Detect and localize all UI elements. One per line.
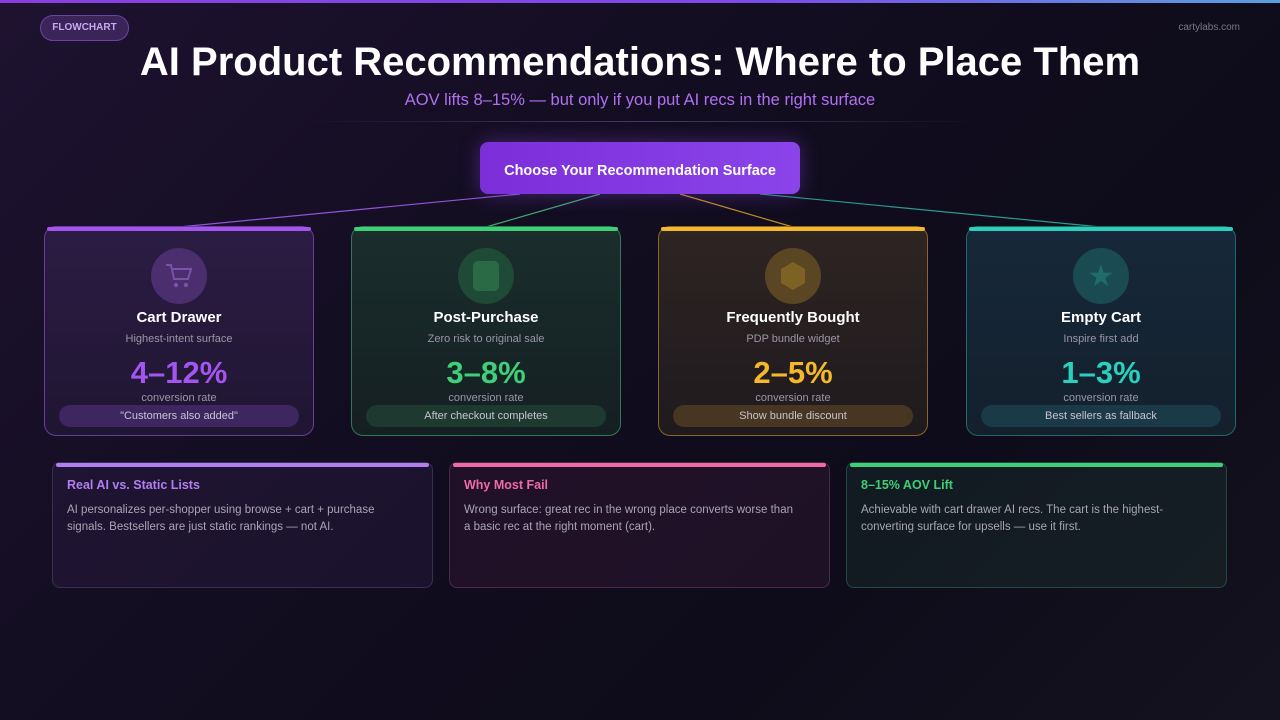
icon: square [458,248,514,304]
note: AOV lift: Achievable with cart drawer AI recs. The cart is the highest-converting surface for upsells — use it first. [861,504,1163,533]
card: cart drawer: Highest-intent surface [126,333,232,345]
icon: star: ★ [1088,260,1114,292]
card: frequently bought: Show bundle discount [739,410,847,422]
icon: cart [151,248,207,304]
connector arrows [183,194,1097,226]
card: post-purchase [351,226,621,436]
note: why most fail: Wrong surface: great rec in the wrong place converts worse than a basic rec at the right moment (cart). [464,504,793,533]
card: frequently bought: Frequently Bought [726,309,860,326]
card: post-purchase: conversion rate [448,392,524,404]
note: real AI: Real AI vs. Static Lists [67,478,200,492]
icon: hexagon [765,248,821,304]
card: cart drawer: Cart Drawer [136,309,222,326]
title: AI Product Recommendations: Where to Place Them [140,40,1140,84]
card: empty cart: Empty Cart [1061,309,1141,326]
note: why most fail [449,462,830,588]
site label: cartylabs.com [1178,22,1240,33]
card: cart drawer: "Customers also added" [120,410,238,422]
card: empty cart: Best sellers as fallback [1045,410,1157,422]
root node [480,142,800,194]
root node: Choose Your Recommendation Surface [504,163,776,179]
note: AOV lift [846,462,1227,588]
card: empty cart: Inspire first add [1063,333,1139,345]
card: frequently bought: conversion rate [755,392,831,404]
card: frequently bought: 2–5% [753,355,833,390]
note: real AI: AI personalizes per-shopper using browse + cart + purchase signals. Bestsellers are just static rankings — not AI. [67,504,374,533]
icon: star [1073,248,1129,304]
card: post-purchase: Zero risk to original sale [428,333,544,345]
subtitle: AOV lifts 8–15% — but only if you put AI recs in the right surface [405,91,875,109]
card: cart drawer: conversion rate [141,392,217,404]
card: post-purchase: 3–8% [446,355,526,390]
card: empty cart: conversion rate [1063,392,1139,404]
card: empty cart [966,226,1236,436]
card: post-purchase: After checkout completes [424,410,548,422]
card: empty cart: 1–3% [1061,355,1141,390]
note: real AI [52,462,433,588]
note: AOV lift: 8–15% AOV Lift [861,478,953,492]
note: why most fail: Why Most Fail [464,478,548,492]
card: frequently bought: PDP bundle widget [746,333,840,345]
card: cart drawer: 4–12% [131,355,227,390]
card: cart drawer [44,226,314,436]
card: post-purchase: Post-Purchase [433,309,539,326]
badge: flowchart: FLOWCHART [52,22,117,33]
badge: flowchart [40,15,129,41]
card: frequently bought [658,226,928,436]
